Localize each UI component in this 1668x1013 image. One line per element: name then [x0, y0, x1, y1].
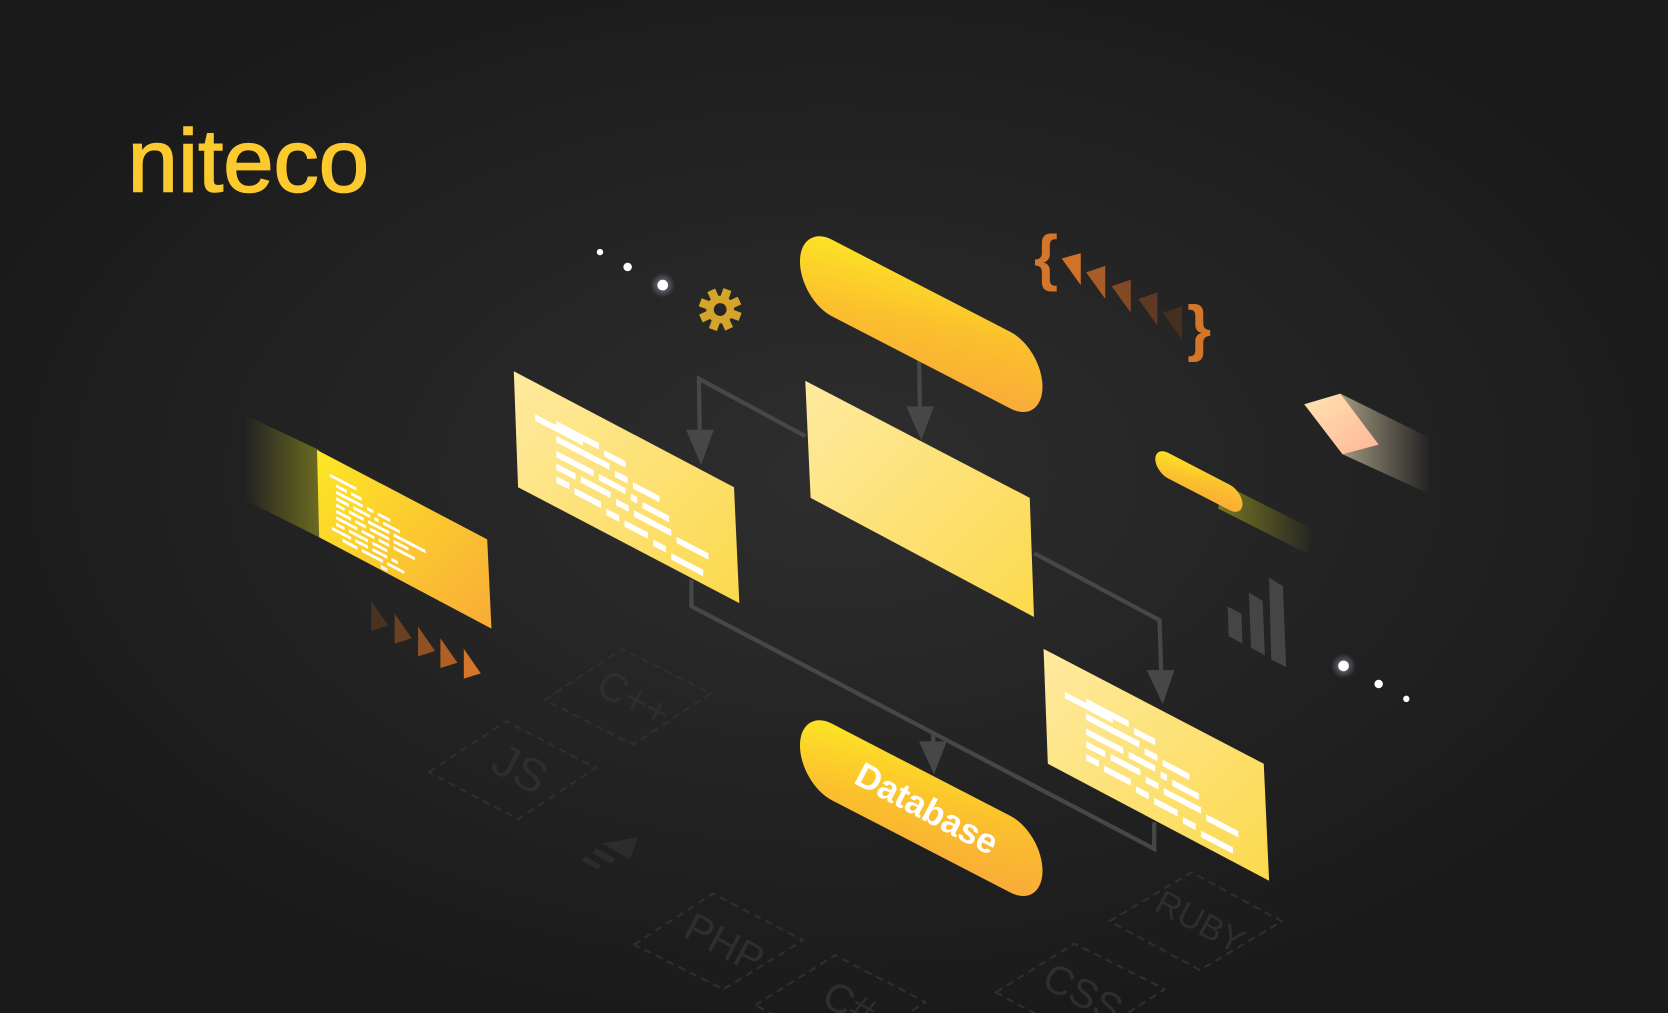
tag: PHP — [634, 894, 803, 989]
tag: RUBY — [1110, 872, 1282, 970]
panel: far-left code — [317, 450, 491, 629]
small pill with trail — [1155, 446, 1314, 553]
tag: C++ — [545, 649, 711, 745]
tag labels: JS — [484, 733, 557, 805]
connectors — [691, 356, 1162, 849]
tag labels: RUBY — [1149, 883, 1250, 961]
tag labels — [484, 660, 1250, 1013]
dots: top-left — [597, 249, 675, 298]
tag labels: PHP — [677, 903, 772, 983]
icon: bar chart — [1228, 578, 1286, 667]
pill: Database: Database — [849, 755, 1005, 863]
tag: C# — [755, 955, 925, 1013]
panel: left code — [514, 371, 739, 603]
icon: faint arrow — [582, 837, 638, 869]
tag labels: C++ — [590, 660, 679, 736]
icon: braces with triangles: { — [1034, 224, 1058, 293]
icon: triangles under far-left panel — [371, 601, 481, 679]
shard with trail — [1304, 394, 1431, 495]
arrowheads — [686, 406, 1174, 774]
icon: braces with triangles — [1034, 224, 1211, 363]
panel: right code — [1044, 649, 1269, 881]
tag: JS — [429, 721, 596, 819]
icon: gear — [693, 282, 747, 337]
dots: right — [1331, 653, 1410, 702]
top pill — [800, 223, 1042, 425]
panel: central — [805, 381, 1034, 617]
icon: braces with triangles: } — [1187, 294, 1211, 363]
tag: CSS — [996, 944, 1165, 1013]
left glow trail — [245, 415, 319, 537]
logo: niteco: niteco — [128, 110, 369, 210]
pill: Database — [800, 707, 1042, 909]
